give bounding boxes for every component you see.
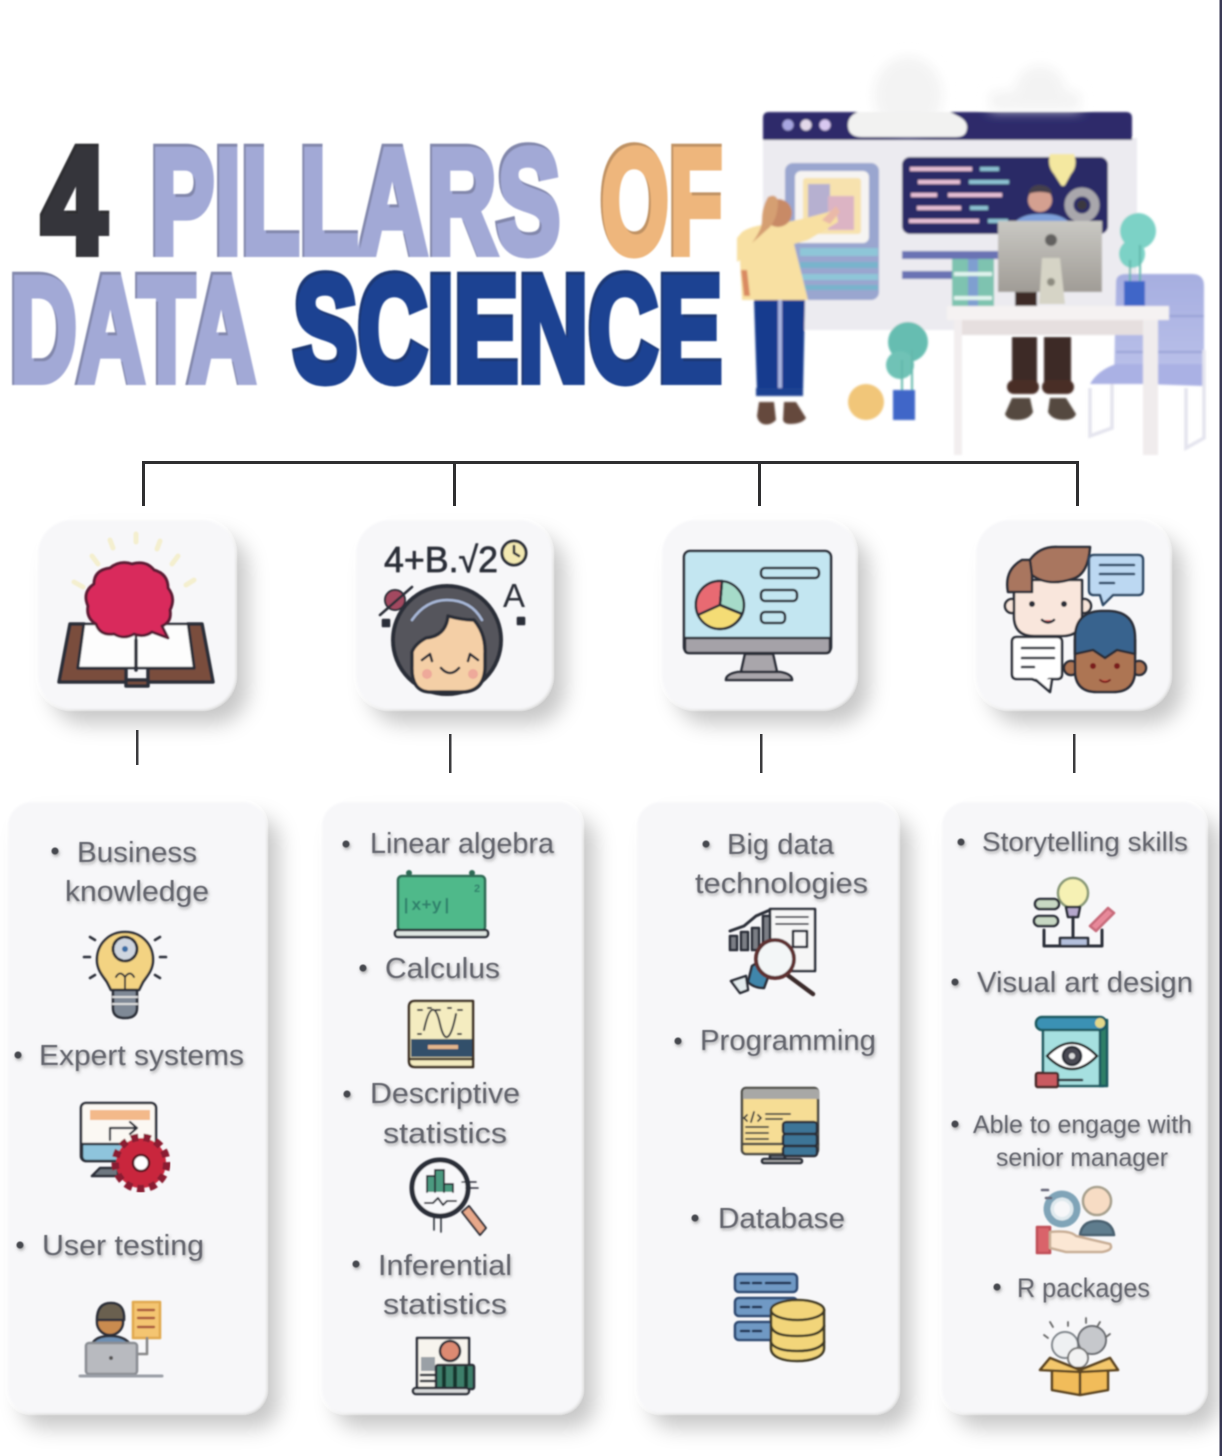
icon: two people with speech bubbles — [1005, 547, 1146, 692]
icon: brain over book — [59, 534, 213, 686]
icon tile: business brain book — [38, 520, 235, 709]
man's legs and shoes — [1005, 337, 1076, 420]
cloud — [874, 57, 1080, 133]
icon: calculus book — [409, 1001, 473, 1067]
left content card — [785, 163, 879, 300]
icon: magnifier with chart — [412, 1160, 486, 1235]
list text: business: Business — [77, 837, 197, 869]
icon tile: communication people — [976, 520, 1170, 709]
list text: data technology — [674, 829, 876, 1235]
gear — [1069, 192, 1095, 218]
list text: mathematics: Calculus — [385, 953, 500, 985]
list text: mathematics: statistics — [383, 1118, 507, 1150]
light bulb — [1049, 154, 1075, 186]
panel: mathematics column — [322, 802, 582, 1413]
list text: mathematics: Linear algebra — [370, 828, 555, 860]
ball — [848, 384, 884, 420]
icon: big data analytics — [730, 909, 815, 994]
list text: mathematics: Inferential — [378, 1250, 512, 1282]
icon: creative lightbulb storytelling — [1034, 878, 1114, 946]
title word: PILLARS: PILLARS — [150, 116, 560, 284]
panel: business column — [8, 802, 266, 1413]
window dots — [782, 120, 830, 130]
page right edge line — [1220, 0, 1222, 1456]
connectors tile to card — [136, 730, 1076, 773]
title word: 4: 4 — [42, 116, 106, 284]
list text: data technology: technologies — [695, 868, 868, 900]
icon: package box — [1040, 1318, 1118, 1395]
icon: monitor with gear — [81, 1103, 166, 1188]
list text: communication: Storytelling skills — [982, 827, 1188, 857]
wall panel — [763, 138, 1137, 330]
list text: business: knowledge — [65, 876, 209, 908]
list text: communication: R packages — [1017, 1273, 1150, 1303]
icon: student with formulae: 4+B.√2 — [384, 539, 498, 580]
icon: manager with gear and hand — [1037, 1187, 1114, 1253]
list text: data technology: Programming — [700, 1025, 876, 1057]
desktop monitor — [998, 221, 1102, 304]
illustration: data science workspace — [737, 57, 1204, 455]
panel: data technology column — [637, 802, 898, 1413]
list text: data technology: Database — [718, 1203, 845, 1235]
list text: mathematics: statistics — [383, 1289, 507, 1321]
list text: business — [14, 837, 244, 1262]
list text: communication: Able to engage with — [973, 1111, 1192, 1139]
icon: green chalkboard: 2 — [474, 883, 480, 895]
icon: light bulb with gear — [84, 932, 166, 1018]
books — [952, 259, 994, 306]
list text: communication — [952, 827, 1193, 1303]
icon: code on monitor — [742, 1088, 819, 1163]
title — [9, 116, 722, 412]
blue bars — [902, 251, 998, 279]
title word: DATA: DATA — [9, 244, 255, 412]
cloud base — [848, 112, 967, 137]
icon tile: data dashboard monitor — [662, 520, 856, 709]
list text: communication: senior manager — [996, 1144, 1168, 1172]
icon: tester at laptop — [80, 1302, 162, 1376]
chair — [1090, 274, 1204, 448]
woman — [737, 196, 840, 424]
connector tree — [142, 461, 1079, 506]
icon: student with formulae: A — [503, 577, 525, 614]
icon: green chalkboard: |x+y| — [401, 897, 452, 916]
list text: business: User testing — [42, 1230, 204, 1262]
list text: business: Expert systems — [39, 1040, 244, 1072]
plant with pot — [886, 322, 928, 420]
desk plant with pot — [1119, 213, 1156, 306]
icon: statistics report — [413, 1338, 474, 1394]
icon: monitor with pie chart — [684, 551, 831, 680]
trousers behind monitor — [1015, 292, 1037, 306]
title word: SCIENCE: SCIENCE — [293, 244, 722, 412]
icon tile: mathematics head — [356, 520, 552, 709]
seated man — [1015, 185, 1069, 230]
panel: communication column — [942, 802, 1206, 1413]
desk — [947, 306, 1169, 455]
list text: data technology: Big data — [727, 829, 835, 861]
icon: visual design book with eye — [1036, 1017, 1107, 1087]
title word: OF: OF — [600, 116, 722, 284]
icon: student with formulae — [380, 539, 526, 694]
icon: green chalkboard — [395, 870, 488, 937]
list text: mathematics — [342, 828, 555, 1321]
list text: communication: Visual art design — [977, 967, 1193, 999]
list text: mathematics: Descriptive — [370, 1078, 520, 1110]
icon: database servers — [735, 1274, 824, 1361]
window title bar — [763, 112, 1132, 140]
code panel — [902, 157, 1108, 234]
